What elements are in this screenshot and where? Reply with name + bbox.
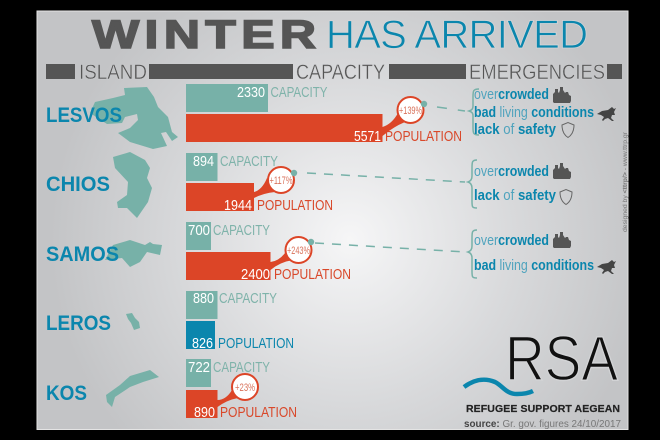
bars: Lesvos: 5571 (354, 128, 381, 145)
bars: Lesvos: CAPACITY (270, 84, 328, 101)
bars: Lesvos (186, 84, 462, 145)
bars: Kos (186, 359, 297, 421)
bars: Kos: 890 (194, 404, 215, 421)
bars: Samos (186, 222, 351, 283)
label: Samos: SAMOS (46, 243, 119, 266)
callout: +139% (382, 97, 427, 136)
callout: +117%: +117% (270, 175, 293, 187)
logo: RSA: RSA (505, 324, 618, 394)
bars: Chios: CAPACITY (220, 153, 278, 170)
bars: Samos: CAPACITY (213, 222, 270, 239)
callout: +23% (218, 374, 258, 407)
title: WINTER (92, 12, 321, 57)
title (92, 12, 588, 57)
emergencies: Samos: bad living conditions (474, 257, 594, 274)
table header (46, 61, 622, 84)
emergencies: Lesvos (469, 86, 616, 138)
credit: designed by <ttrp/> - www.ttrp.gr (622, 131, 629, 232)
bars: Samos: POPULATION (274, 266, 351, 283)
callout: +117% (254, 167, 297, 198)
logo: RSA: REFUGEE SUPPORT AEGEAN (466, 403, 620, 415)
bars: Kos: POPULATION (220, 404, 297, 421)
map: Lesvos (90, 87, 178, 149)
emergencies: Samos (468, 230, 616, 278)
map: Samos (105, 240, 162, 267)
callout: +243%: +243% (287, 245, 310, 257)
bars: Samos: 2400 (241, 266, 270, 283)
bars: Leros: POPULATION (218, 335, 294, 352)
bars: Lesvos: 2330 (237, 84, 265, 101)
map: Leros (126, 313, 140, 330)
dashed connector: Samos (315, 243, 465, 252)
emergencies: Lesvos: overcrowded (474, 86, 549, 103)
bars: Chios: 1944 (224, 197, 252, 214)
label: Lesvos: LESVOS (46, 104, 122, 127)
map: Chios (113, 152, 152, 218)
callout: +243% (270, 237, 314, 270)
emergencies: Lesvos: lack of safety (474, 121, 557, 138)
emergencies: Chios: lack of safety (474, 187, 557, 204)
bars: Chios: 894 (193, 153, 214, 170)
dashed connector: Chios (307, 173, 465, 182)
emergencies: Samos: overcrowded (474, 232, 549, 249)
table header: CAPACITY (296, 61, 385, 84)
callout: +23%: +23% (235, 382, 255, 394)
source: source: Gr. gov. figures 24/10/2017 (464, 418, 621, 430)
bars: Leros (186, 290, 294, 352)
table header: EMERGENCIES (469, 61, 605, 84)
table header: ISLAND (79, 61, 147, 84)
callout: +139%: +139% (399, 105, 422, 117)
emergencies: Chios: overcrowded (474, 163, 549, 180)
bars: Kos: CAPACITY (213, 359, 270, 376)
label: Chios: CHIOS (46, 173, 110, 196)
bars: Kos: 722 (188, 359, 210, 376)
bars: Leros: CAPACITY (219, 290, 277, 307)
label: Kos: KOS (46, 382, 87, 405)
bars: Leros: 826 (192, 335, 213, 352)
title: HAS ARRIVED (326, 13, 588, 57)
bars: Samos: 700 (188, 222, 210, 239)
emergencies: Chios (468, 160, 572, 208)
dashed connector: Lesvos (437, 107, 465, 111)
label: Leros: LEROS (46, 312, 111, 335)
logo: RSA (464, 324, 620, 415)
emergencies: Lesvos: bad living conditions (474, 104, 594, 121)
bars: Lesvos: POPULATION (385, 128, 462, 145)
map: Kos (106, 370, 159, 407)
bars: Chios (186, 153, 333, 214)
bars: Chios: POPULATION (257, 197, 333, 214)
bars: Leros: 880 (193, 290, 214, 307)
